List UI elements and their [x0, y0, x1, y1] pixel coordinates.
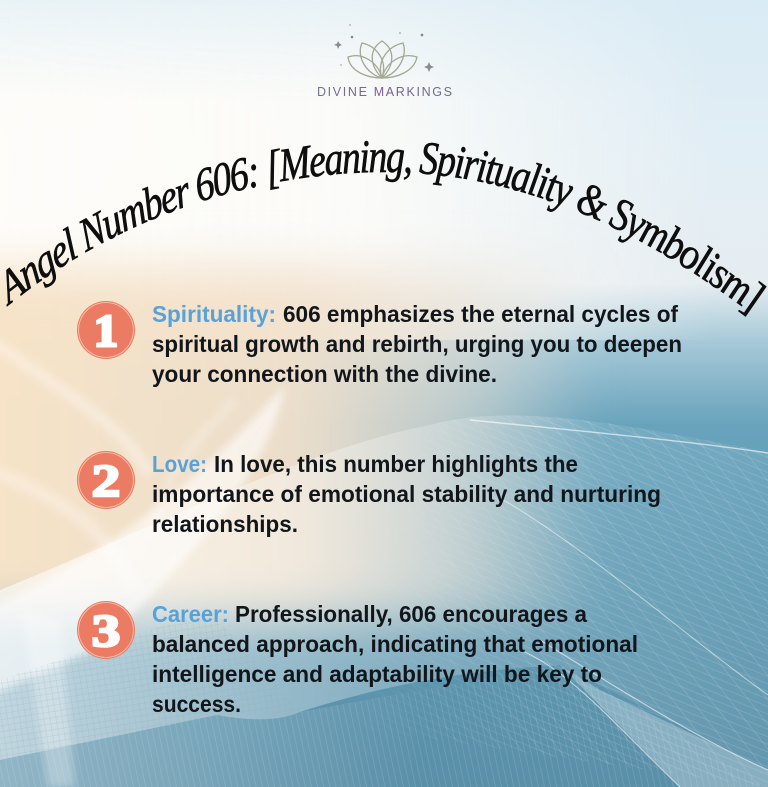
text: Spirituality: 606 emphasizes the eternal cycles of: [283, 301, 678, 327]
item 2: Love: [77, 451, 661, 537]
text: Love: [152, 451, 661, 537]
badge 1: 1: [94, 306, 118, 357]
text: Career: [152, 601, 638, 717]
item 1: Spirituality: [77, 301, 682, 387]
badge 3: 3: [92, 606, 120, 657]
item 3: Career: [77, 601, 638, 717]
text: Career: Professionally, 606 encourages a: [235, 601, 587, 627]
text: Love: relationships.: [152, 511, 298, 537]
icon: sparkles: [334, 24, 434, 72]
logo wordmark: DIVINE MARKINGS: [317, 85, 452, 99]
icon: lotus: [348, 41, 417, 78]
text: Love: importance of emotional stability and nurturing: [152, 481, 661, 507]
logo: Divine Markings: [317, 24, 452, 99]
text: Spirituality: [152, 301, 682, 387]
text: Spirituality: Spirituality:: [152, 301, 276, 327]
text: Love: Love:: [152, 451, 207, 477]
text: Career: Career:: [152, 601, 229, 627]
badge 2: 2: [92, 456, 120, 507]
title: Angel Number 606: [Meaning, Spirituality & Symbolism]: [6, 140, 767, 317]
text: Career: intelligence and adaptability will be key to: [152, 661, 602, 687]
text: Spirituality: your connection with the divine.: [152, 361, 497, 387]
text: Career: balanced approach, indicating that emotional: [152, 631, 638, 657]
text: Career: success.: [152, 691, 241, 717]
text: Spirituality: spiritual growth and rebirth, urging you to deepen: [152, 331, 682, 357]
badge 2: [77, 451, 135, 509]
badge 1: [77, 301, 135, 359]
text: Love: In love, this number highlights the: [214, 451, 578, 477]
badge 3: [77, 601, 135, 659]
